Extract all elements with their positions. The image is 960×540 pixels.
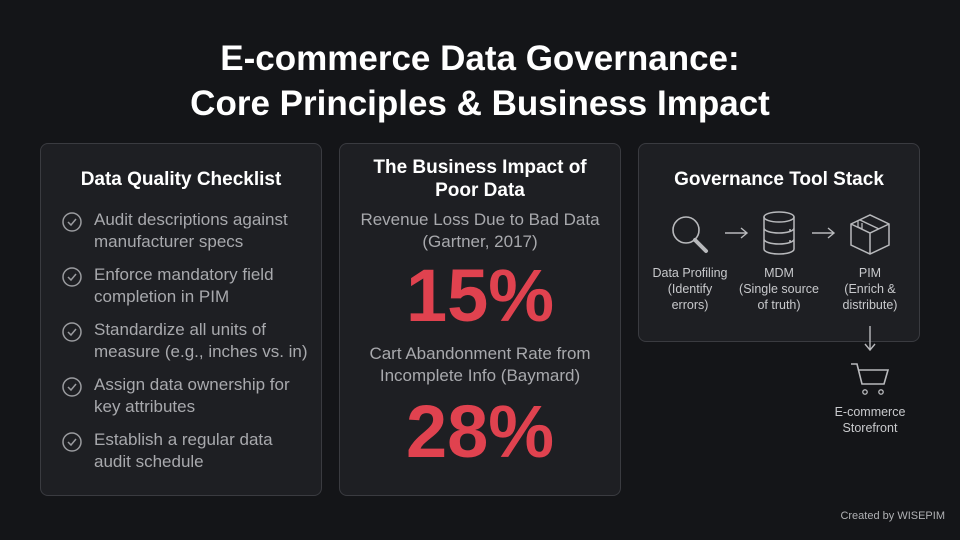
heading: impact: The Business Impact of — [373, 157, 587, 178]
stat 15%: 15% — [406, 254, 554, 337]
panel: tool stack — [638, 143, 920, 342]
label: data profiling: errors) — [672, 298, 708, 312]
heading: checklist: Data Quality Checklist — [81, 169, 281, 190]
label: data profiling: Data Profiling — [652, 266, 728, 280]
item 4: Assign data ownership for — [94, 375, 290, 394]
stat 28%: 28% — [406, 390, 554, 473]
title: E-commerce Data Governance: — [220, 39, 740, 78]
panel: data quality checklist — [40, 143, 322, 496]
label: MDM: MDM — [764, 266, 794, 280]
item 3: measure (e.g., inches vs. in) — [94, 342, 308, 361]
stat label 1 — [360, 210, 600, 251]
label: storefront — [835, 405, 905, 435]
item 3 — [62, 320, 308, 361]
label: PIM: distribute) — [843, 298, 897, 312]
item 5: audit schedule — [94, 452, 204, 471]
label: PIM — [843, 266, 897, 312]
item 1 — [62, 210, 288, 251]
item 3: Standardize all units of — [94, 320, 266, 339]
title — [190, 39, 770, 123]
stat label 2: Incomplete Info (Baymard) — [380, 366, 580, 385]
item 5: Establish a regular data — [94, 430, 273, 449]
label: data profiling — [652, 266, 728, 312]
item 2 — [62, 265, 274, 306]
arrow 1 — [725, 228, 748, 238]
arrow down — [864, 326, 876, 351]
label: MDM — [739, 266, 819, 312]
panel: business impact — [339, 143, 621, 496]
item 2: completion in PIM — [94, 287, 229, 306]
heading: tool stack: Governance Tool Stack — [674, 169, 884, 190]
stat label 1: (Gartner, 2017) — [422, 232, 538, 251]
label: data profiling: (Identify — [668, 282, 712, 296]
icon: box — [850, 214, 890, 255]
heading: impact — [373, 157, 587, 201]
item 4: key attributes — [94, 397, 195, 416]
stat label 2 — [369, 344, 591, 385]
label: PIM: PIM — [859, 266, 881, 280]
item 5 — [62, 430, 273, 471]
icon: cart — [851, 363, 889, 395]
label: storefront: Storefront — [843, 421, 897, 435]
label: MDM: of truth) — [757, 298, 801, 312]
item 4 — [62, 375, 290, 416]
icon: database — [763, 211, 795, 255]
item 1: Audit descriptions against — [94, 210, 288, 229]
stat label 1: Revenue Loss Due to Bad Data — [360, 210, 600, 229]
title: Core Principles & Business Impact — [190, 84, 770, 123]
footer credit: Created by WISEPIM — [840, 510, 945, 522]
label: MDM: (Single source — [739, 282, 819, 296]
label: PIM: (Enrich & — [844, 282, 896, 296]
item 2: Enforce mandatory field — [94, 265, 274, 284]
heading: impact: Poor Data — [435, 180, 525, 201]
stat label 2: Cart Abandonment Rate from — [369, 344, 591, 363]
arrow 2 — [812, 228, 835, 238]
label: storefront: E-commerce — [835, 405, 905, 419]
icon: magnifier — [672, 216, 708, 254]
item 1: manufacturer specs — [94, 232, 243, 251]
